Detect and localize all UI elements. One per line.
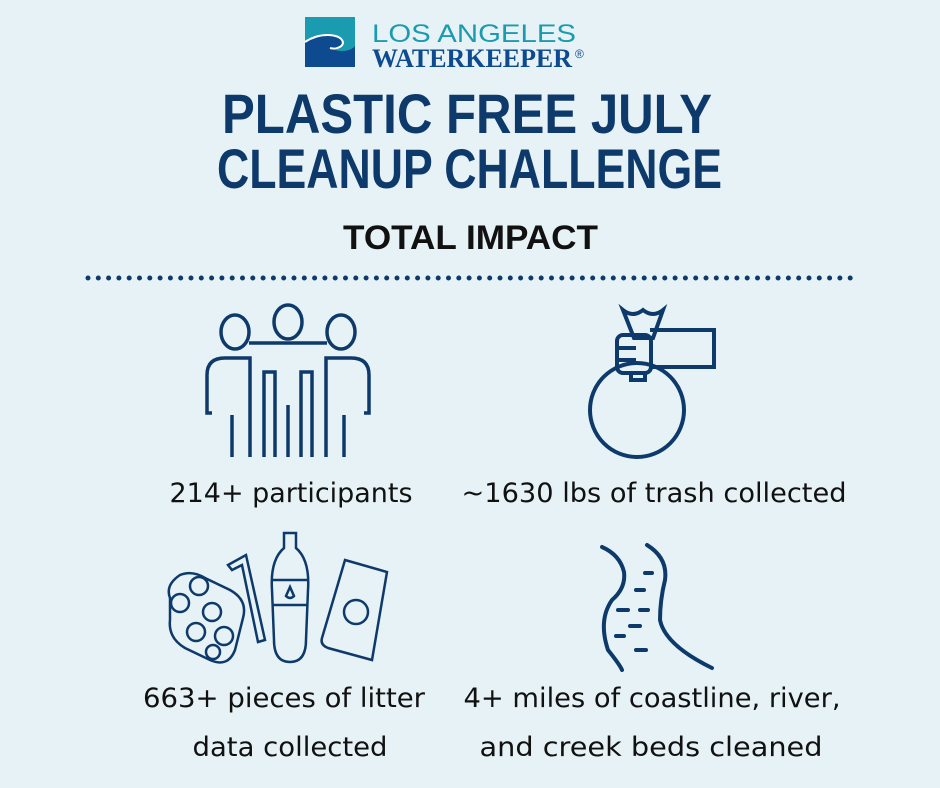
logo: ®	[575, 47, 584, 61]
stat: trash: ~1630 lbs of trash collected	[462, 478, 846, 509]
title: PLASTIC FREE JULY	[222, 82, 712, 145]
stat: miles: 4+ miles of coastline, river,	[464, 683, 840, 714]
icon: people	[207, 305, 369, 457]
stat: miles: and creek beds cleaned	[480, 732, 822, 763]
logo	[305, 17, 584, 73]
stat: litter	[143, 683, 426, 763]
title	[217, 82, 722, 200]
logo: LOS ANGELES	[372, 20, 576, 48]
logo: WATERKEEPER	[372, 44, 572, 73]
stat: miles	[464, 683, 840, 763]
icon: river	[602, 545, 712, 670]
stat: litter: data collected	[192, 732, 388, 763]
icon: litter	[169, 533, 387, 662]
title: CLEANUP CHALLENGE	[217, 137, 722, 200]
stat: litter: 663+ pieces of litter	[143, 683, 426, 714]
subtitle: total impact: TOTAL IMPACT	[343, 219, 598, 257]
stat: participants: 214+ participants	[170, 478, 412, 509]
icon: trash bag	[590, 310, 714, 457]
